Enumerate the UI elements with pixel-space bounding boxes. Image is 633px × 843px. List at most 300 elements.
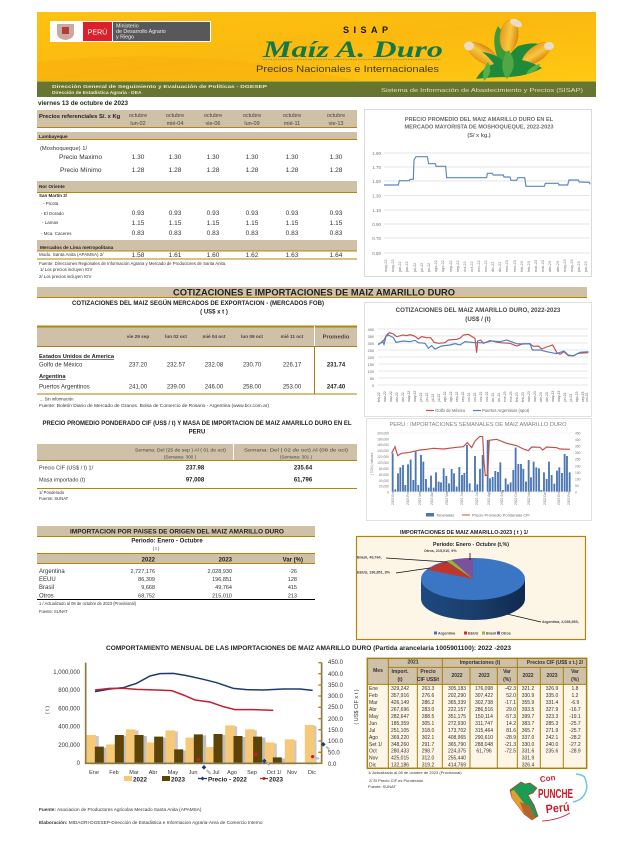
chart: Moshoqueque wholesale price line: sep-22	[449, 260, 453, 272]
panel: monthly data table: Set 1/	[369, 742, 383, 748]
chart: weekly imports Peru: 2022 Oct	[514, 492, 518, 505]
chart: maize quotations 2022-2023: 350	[368, 335, 374, 339]
panel: national reference prices table: 1.30	[246, 154, 259, 161]
chart: maize quotations 2022-2023: mar-22	[389, 391, 393, 402]
chart: Moshoqueque wholesale price line: feb-23	[520, 261, 524, 272]
panel: monthly data table: 425,015	[391, 756, 409, 762]
panel: monthly data table: 1/ Actualizado al 08 de octubre de 2023 (Provisional)	[368, 770, 462, 775]
chart: maize quotations 2022-2023: nov-22	[479, 392, 483, 402]
panel: national reference prices table: 1.28	[246, 167, 259, 174]
chart: monthly imports and prices: Jun	[189, 770, 197, 776]
panel: monthly data table: 318.0	[422, 728, 434, 734]
panel: monthly data table: 357,916	[391, 693, 409, 699]
panel: monthly data table: 426,149	[391, 700, 409, 706]
chart: monthly imports and prices: 450.0	[328, 660, 344, 666]
chart: weekly imports Peru: PERU : IMPORTACIONES SEMANALES DE MAIZ AMARILLO DURO	[389, 422, 567, 428]
chart: weekly imports Peru: 2022 Dic	[543, 492, 547, 505]
logo: Con Punche Peru: Con	[539, 773, 556, 784]
panel: monthly data table: 393.5	[522, 707, 534, 713]
panel: weighted CIF price table: 61,796	[294, 478, 313, 484]
chart: monthly imports and prices: 400,000	[58, 724, 81, 730]
panel: monthly data table: 369,220	[391, 735, 409, 741]
chart: weekly imports Peru: 2022 Jun	[460, 491, 464, 505]
chart: monthly imports and prices	[45, 660, 360, 784]
chart: Moshoqueque wholesale price line: ago-22	[434, 260, 438, 272]
panel: weighted CIF price table: 237.98	[186, 466, 205, 472]
panel: monthly data table: 307,422	[475, 693, 493, 699]
panel: monthly data table: 173,702	[448, 728, 466, 734]
panel: monthly data table: 305.1	[422, 721, 434, 727]
panel: national reference prices table: 1.15	[286, 220, 299, 227]
chart: weekly imports Peru: 200,000	[377, 432, 389, 436]
chart: monthly imports and prices: Ene	[89, 770, 99, 776]
panel: national reference prices table: 1.63	[286, 252, 299, 259]
panel: monthly data table: -72.5	[505, 749, 516, 755]
panel: monthly data table: 2022	[522, 673, 534, 679]
chart: Moshoqueque wholesale price line: feb-23	[527, 261, 531, 272]
panel: monthly data table: 321.2	[522, 686, 534, 692]
chart: monthly imports and prices: Mar	[129, 770, 139, 776]
section heading band: COTIZACIONES E IMPORTACIONES DE MAIZ AMARILLO DURO	[173, 288, 455, 298]
panel: FOB quotations table: COTIZACIONES DEL MAIZ SEGÚN MERCADOS DE EXPORTACION - (MERCADOS FOB)	[72, 300, 324, 307]
panel: FOB quotations table: Promedio	[323, 334, 350, 340]
panel: monthly data table: (%)	[503, 677, 511, 683]
panel: national reference prices table: 1.28	[132, 167, 145, 174]
panel: monthly data table: -57.3	[505, 714, 516, 720]
panel: national reference prices table: Lambayeque	[39, 134, 68, 139]
chart: monthly imports and prices: Oct 1/	[267, 770, 282, 776]
panel: national reference prices table: 1.15	[207, 220, 220, 227]
header banner	[37, 12, 596, 97]
panel: monthly data table: 331.4	[546, 700, 558, 706]
chart: maize quotations 2022-2023: sep-22	[455, 392, 459, 402]
panel: national reference prices table: lun-02	[130, 121, 146, 127]
panel: weighted CIF price table: 235.64	[294, 466, 313, 472]
panel: monthly data table: 414,769	[448, 762, 466, 768]
panel: monthly data table: 285.3	[546, 721, 558, 727]
panel: national reference prices table: vie-13	[329, 121, 343, 127]
panel: monthly data table: Feb	[369, 693, 378, 699]
panel: monthly data table: 132,186	[391, 762, 409, 768]
panel: national reference prices table: Precios referenciales S/. x Kg	[39, 114, 121, 120]
chart: Moshoqueque wholesale price line: MERCADO MAYORISTA DE MOSHOQUEQUE, 2022-2023	[404, 124, 554, 130]
chart: maize quotations 2022-2023: abr-22	[395, 392, 399, 402]
panel: monthly data table: 202,290	[448, 693, 466, 699]
panel: monthly data table: 335.0	[546, 693, 558, 699]
panel: monthly data table: 286,516	[475, 707, 493, 713]
panel: national reference prices table: 1.58	[132, 252, 145, 259]
chart: maize quotations 2022-2023: jun-22	[425, 392, 429, 403]
panel: national reference prices table: 0.93	[330, 210, 343, 217]
chart title: monthly behaviour: COMPORTAMIENTO MENSUAL DE LAS IMPORTACIONES DE MAIZ AMARILLO DURO (Partida arancelaria 1005901100): 2022 -2023	[106, 645, 512, 652]
panel: national reference prices table: - Picota	[43, 201, 59, 206]
panel: imports by origin table: Var (%)	[283, 558, 303, 564]
panel: monthly data table: Abr	[369, 707, 377, 713]
panel: imports by origin table: 49,764	[215, 585, 232, 591]
panel: imports by origin table: Brasil	[39, 585, 54, 591]
banner subtitle: Precios Nacionales e Internacionales	[256, 64, 439, 75]
panel: national reference prices table: Nor Oriente	[39, 184, 65, 189]
panel: imports by origin table: 9,668	[141, 585, 155, 591]
chart: maize quotations 2022-2023: 0	[372, 384, 374, 388]
chart: weekly imports Peru: 2022 Abr	[430, 491, 434, 505]
panel: monthly data table: Importaciones (t)	[460, 660, 501, 666]
chart: Moshoqueque wholesale price line: 0.90	[372, 222, 381, 227]
source note: Fuente: Asociacion de Productores Agricolas Mercado Santa Anita (APAMSA)	[39, 807, 202, 812]
panel: FOB quotations table: ( US$ x t )	[200, 310, 228, 316]
chart: maize quotations 2022-2023: may-22	[413, 391, 417, 402]
panel: national reference prices table: octubre	[204, 113, 222, 119]
panel: FOB quotations table: 239.00	[167, 384, 186, 390]
panel: monthly data table: May	[369, 714, 379, 720]
chart: maize quotations 2022-2023: jul-23	[569, 394, 573, 403]
panel: monthly data table: -42.3	[505, 686, 516, 692]
panel: monthly data table: 224,375	[448, 749, 466, 755]
chart: maize quotations 2022-2023: mar-22	[383, 391, 387, 402]
chart: maize quotations 2022-2023: 250	[368, 349, 374, 353]
chart: Moshoqueque wholesale price line: jul-22	[427, 263, 431, 273]
chart: monthly imports and prices: 50.0	[328, 750, 340, 756]
panel: monthly data table: 305,183	[448, 686, 466, 692]
panel: monthly data table: (t)	[398, 677, 403, 683]
chart: origin pie: Periodo: Enero - Octubre (t,%)	[433, 542, 509, 548]
chart: origin pie: EEUU	[468, 632, 479, 636]
chart: weekly imports Peru: 2023 Feb	[406, 491, 410, 505]
chart: Moshoqueque wholesale price line: 1.90	[372, 151, 381, 156]
panel: national reference prices table: 1.61	[169, 252, 182, 259]
panel: monthly data table: 337.0	[522, 735, 534, 741]
chart: maize quotations 2022-2023: Golfo de México	[435, 408, 466, 413]
panel: monthly data table: Nov	[369, 756, 378, 762]
panel: weighted CIF price table: Precio CIF (US$ / t) 1/	[39, 466, 94, 472]
chart: Moshoqueque wholesale price line: jun-23	[577, 261, 581, 273]
panel: national reference prices table: 0.83	[246, 230, 259, 237]
chart: maize quotations 2022-2023: abr-23	[545, 392, 549, 402]
panel: national reference prices table: 0.83	[330, 230, 343, 237]
chart: maize quotations 2022-2023: feb-23	[521, 392, 525, 402]
panel: monthly data table: 251,105	[391, 728, 409, 734]
panel: FOB quotations table: 246.00	[205, 384, 224, 390]
chart: maize quotations 2022-2023	[364, 302, 592, 416]
panel: monthly data table: 283.0	[422, 707, 434, 713]
chart: Moshoqueque wholesale price line: nov-22	[484, 260, 488, 272]
panel: imports by origin table: 2,028,930	[208, 569, 232, 575]
chart: monthly imports and prices: Jul	[212, 770, 220, 776]
panel: national reference prices table: 1.15	[330, 220, 343, 227]
panel: national reference prices table: 1/ Los precios incluyen IGV	[40, 267, 92, 272]
chart: origin pie	[356, 530, 586, 640]
panel: monthly data table: -19.1	[569, 714, 581, 720]
panel: FOB quotations table: mié 11 oct	[281, 334, 304, 339]
chart: maize quotations 2022-2023: 300	[368, 342, 374, 346]
panel: national reference prices table: 1.64	[330, 252, 343, 259]
panel: national reference prices table: 0.83	[132, 230, 145, 237]
panel: weighted CIF price table: Fuente: SUNAT	[39, 496, 69, 501]
logo: Con Punche Peru	[510, 773, 587, 821]
chart: origin pie: Otros	[501, 632, 511, 636]
panel: FOB quotations table: vie 29 sep	[127, 334, 149, 339]
chart: weekly imports Peru: 2022 May	[445, 490, 449, 505]
date: viernes 13 de octubre de 2023	[38, 100, 128, 107]
panel: weighted CIF price table: Masa importado (t)	[39, 478, 85, 484]
panel: monthly data table: 235.6	[546, 749, 558, 755]
chart: Moshoqueque wholesale price line: 1.10	[372, 208, 381, 213]
panel: monthly data table: 365.7	[522, 728, 534, 734]
panel: monthly data table: 14.2	[506, 721, 516, 727]
chart: maize quotations 2022-2023: may-23	[551, 391, 555, 402]
chart: monthly imports and prices: Ago	[227, 770, 237, 776]
panel: national reference prices table: 1.30	[132, 154, 145, 161]
panel: national reference prices table: 0.93	[286, 210, 299, 217]
panel: national reference prices table: Precio Mínimo	[60, 167, 102, 174]
chart: maize quotations 2022-2023: Puertos Argentinos (spot)	[482, 408, 530, 413]
chart: Moshoqueque wholesale price line: mar-23	[541, 260, 545, 272]
chart: origin pie: Otros, 215,010, 9%	[424, 549, 457, 553]
logo: Ministerio de Desarrollo Agrario y Riego: de Desarrollo Agrario	[116, 29, 166, 35]
panel: monthly data table: Jun	[369, 721, 377, 727]
chart: Moshoqueque wholesale price line: dic-22	[491, 262, 495, 272]
panel: imports by origin table: 86,309	[138, 577, 155, 583]
panel: imports by origin table: Argentina	[39, 569, 65, 575]
chart: maize quotations 2022-2023: 400	[368, 328, 374, 332]
panel: monthly data table: 2023	[546, 673, 558, 679]
chart: Moshoqueque wholesale price line: ago-22	[441, 260, 445, 272]
chart: weekly imports Peru: 180,000	[377, 438, 389, 442]
panel: national reference prices table: lun-09	[244, 121, 260, 127]
panel: national reference prices table: 1.15	[169, 220, 182, 227]
panel: FOB quotations table: Puertos Argentinos	[39, 384, 90, 390]
chart: Moshoqueque wholesale price line: jun-23	[584, 261, 588, 273]
panel: national reference prices table: 0.83	[286, 230, 299, 237]
header banner: Dirección de Estadística Agraria - DEA	[52, 90, 142, 96]
panel: national reference prices table: 1.30	[207, 154, 220, 161]
panel: monthly data table: 326.9	[546, 686, 558, 692]
chart legend	[124, 776, 284, 784]
chart: maize quotations 2022-2023: sep-22	[461, 392, 465, 402]
panel: national reference prices table: - Lamas	[42, 220, 59, 225]
panel: monthly data table: 330.0	[522, 742, 534, 748]
chart: monthly imports and prices: Nov	[287, 770, 297, 776]
chart: Moshoqueque wholesale price line: sep-22	[456, 260, 460, 272]
chart: maize quotations 2022-2023: abr-23	[539, 392, 543, 402]
chart: maize quotations 2022-2023: nov-22	[485, 392, 489, 402]
chart: monthly imports and prices: 600,000	[58, 706, 81, 712]
chart: weekly imports Peru: ( TON.) Valores	[370, 452, 374, 475]
panel: monthly data table: 319.2	[422, 762, 434, 768]
chart: origin pie: Argentina, 2,028,930,	[542, 620, 579, 624]
panel: national reference prices table: octubre	[166, 113, 184, 119]
panel: monthly data table: 2021	[407, 660, 419, 666]
panel: FOB quotations table: 247.40	[327, 384, 346, 390]
chart legend: 2023	[269, 776, 284, 784]
panel: FOB quotations table: lun 02 oct	[165, 334, 187, 339]
chart: weekly imports Peru: 20,000	[379, 484, 389, 488]
chart: maize quotations 2022-2023: ene-23	[503, 391, 507, 402]
chart: origin pie: Argentina	[438, 632, 456, 636]
panel: monthly data table: 288.5	[422, 714, 434, 720]
panel: monthly data table: 255,440	[448, 756, 466, 762]
panel: imports by origin table: ( t )	[153, 546, 160, 551]
panel: monthly data table: Ene	[369, 686, 378, 692]
chart: monthly imports and prices: 0	[77, 761, 81, 767]
chart: Moshoqueque wholesale price line: may-22	[391, 259, 395, 272]
panel: imports by origin table: Periodo: Enero - Octubre	[131, 538, 203, 544]
panel: imports by origin table: 415	[288, 585, 297, 591]
panel: monthly data table: 1.2	[572, 693, 579, 699]
panel: monthly data table: 351,175	[448, 714, 466, 720]
panel: monthly data table: 288,048	[475, 742, 493, 748]
panel: monthly data table: 365,339	[448, 700, 466, 706]
chart: Moshoqueque wholesale price line: jun-22	[405, 261, 409, 273]
panel: national reference prices table: octubre	[327, 113, 345, 119]
chart: weekly imports Peru: 2022 Ago	[487, 491, 491, 505]
chart: Moshoqueque wholesale price line	[364, 110, 592, 276]
chart: Moshoqueque wholesale price line: 1.70	[372, 165, 381, 170]
chart: weekly imports Peru: Toneladas	[436, 512, 454, 518]
chart: maize quotations 2022-2023: jul-22	[431, 394, 435, 403]
panel: national reference prices table: octubre	[129, 113, 147, 119]
panel: FOB quotations table: 258.00	[243, 384, 262, 390]
panel: monthly data table: 302,738	[475, 700, 493, 706]
panel: national reference prices table: 1.60	[207, 252, 220, 259]
chart: monthly imports and prices: Sep	[247, 770, 257, 776]
panel: monthly data table: 315,464	[475, 728, 493, 734]
chart: maize quotations 2022-2023: (US$ / (t)	[465, 316, 491, 323]
panel: imports by origin table: IMPORTACION POR PAISES DE ORIGEN DEL MAIZ AMARILLO DURO	[70, 530, 284, 536]
panel: national reference prices table: vie-06	[206, 121, 220, 127]
panel: FOB quotations table: ... Sin información	[40, 396, 74, 402]
chart: maize quotations 2022-2023: ago-23	[575, 391, 579, 402]
panel: monthly data table: 326.4	[522, 762, 534, 768]
chart: weekly imports Peru: 250	[575, 458, 581, 462]
panel: monthly data table: 329,242	[391, 686, 409, 692]
chart: weekly imports Peru: 2023 Ene	[391, 491, 395, 505]
panel: national reference prices table: 0.93	[246, 210, 259, 217]
chart: weekly imports Peru: 2023 Feb	[567, 491, 571, 505]
panel: monthly data table: 327.9	[546, 707, 558, 713]
panel: imports by origin table: 2,727,176	[131, 569, 155, 575]
panel: national reference prices table: San Martín 2/	[39, 193, 68, 198]
panel: imports by origin table: -26	[289, 569, 297, 575]
panel: monthly data table: -25.7	[569, 728, 581, 734]
chart: Moshoqueque wholesale price line: ene-23	[505, 260, 509, 272]
chart: weekly imports Peru: 450	[575, 432, 581, 436]
chart: monthly imports and prices: 0.0	[328, 762, 337, 768]
panel: monthly data table: 280,433	[391, 749, 409, 755]
chart: monthly imports and prices: 1,000,000	[53, 670, 81, 676]
panel: imports by origin table	[37, 526, 315, 614]
panel: monthly data table: 399.7	[522, 714, 534, 720]
panel: monthly data table: Mar	[369, 700, 378, 706]
chart: maize quotations 2022-2023: 50	[370, 377, 374, 381]
panel: monthly data table: 291.7	[422, 742, 434, 748]
panel: imports by origin table: 196,851	[212, 577, 232, 583]
panel: monthly data table: -6.9	[571, 700, 580, 706]
chart: weekly imports Peru: 50	[575, 484, 579, 488]
panel: monthly data table: 2023	[478, 673, 490, 679]
chart: maize quotations 2022-2023: ago-22	[449, 391, 453, 402]
panel: national reference prices table: 0.93	[207, 210, 220, 217]
panel: monthly data table: 383.7	[522, 721, 534, 727]
chart: origin pie: IMPORTACIONES DE MAIZ AMARILLO-2023 ( t ) 1/	[400, 530, 528, 536]
chart: weekly imports Peru: 120,000	[377, 455, 389, 459]
panel: monthly data table: -27.2	[569, 742, 581, 748]
chart: maize quotations 2022-2023: oct-23	[585, 392, 589, 402]
panel: weighted CIF price table	[37, 421, 357, 501]
panel: weighted CIF price table: (Semana: 301 )	[280, 454, 313, 460]
chart: Moshoqueque wholesale price line: may-23	[570, 259, 574, 272]
chart: weekly imports Peru: 2023 Mar	[418, 490, 422, 505]
panel: monthly data table: 408,965	[448, 735, 466, 741]
panel: monthly data table: 355.9	[522, 700, 534, 706]
panel: monthly data table: 298.7	[422, 749, 434, 755]
chart: monthly imports and prices: 800,000	[58, 688, 81, 694]
panel: national reference prices table: 1.30	[286, 154, 299, 161]
chart: Moshoqueque wholesale price line: 0.70	[372, 236, 381, 241]
chart: weekly imports Peru: 0	[387, 490, 389, 494]
panel: national reference prices table: 1.30	[330, 154, 343, 161]
chart: Moshoqueque wholesale price line: PRECIO PROMEDIO DEL MAIZ AMARILLO DURO EN EL	[405, 117, 554, 123]
panel: monthly data table: CIF US$/t	[417, 677, 439, 683]
chart: maize quotations 2022-2023: dic-22	[497, 393, 501, 402]
panel: monthly data table: (%)	[571, 677, 579, 683]
panel: monthly data table: 222,157	[448, 707, 466, 713]
chart: weekly imports Peru: 60,000	[379, 473, 389, 477]
chart: maize quotations 2022-2023: mar-23	[527, 391, 531, 402]
chart legend: Precio - 2022	[208, 776, 247, 784]
chart: weekly imports Peru: 400	[575, 438, 581, 442]
banner title SISAP: SISAP	[343, 25, 388, 35]
panel: national reference prices table: 1.15	[246, 220, 259, 227]
chart: maize quotations 2022-2023: sep-23	[581, 392, 585, 402]
panel: monthly data table: 323.3	[546, 714, 558, 720]
chart: Moshoqueque wholesale price line: ene-23	[513, 260, 517, 272]
panel: national reference prices table: octubre	[283, 113, 301, 119]
panel: monthly data table: 81.6	[506, 728, 516, 734]
panel: monthly data table: Mes	[373, 668, 383, 674]
panel: monthly data table: 263.3	[422, 686, 434, 692]
panel: monthly data table: 267,696	[391, 707, 409, 713]
panel: national reference prices table: 1.28	[169, 167, 182, 174]
chart: monthly imports and prices: 100.0	[328, 739, 344, 745]
panel: FOB quotations table: Fuente: Boletín Diario de Mercado de Granos. Bolsa de Comercio de Rosario - Argentina (www.bcr.com.ar)	[39, 403, 270, 408]
panel: FOB quotations table: 253.00	[283, 384, 302, 390]
panel: imports by origin table: 213	[288, 594, 297, 600]
panel: monthly data table: -28.9	[505, 735, 516, 741]
panel: national reference prices table: 0.83	[207, 230, 220, 237]
chart: weekly imports Peru: 2022 Nov	[527, 491, 531, 505]
panel: monthly data table: 29.0	[506, 707, 516, 713]
panel: FOB quotations table: 231.74	[327, 362, 346, 368]
panel: monthly data table: Ago	[369, 735, 378, 741]
chart: monthly imports and prices: May	[168, 770, 178, 776]
panel: monthly data table: Var	[571, 669, 579, 675]
chart: monthly imports and prices: 200.0	[328, 717, 344, 723]
chart: Moshoqueque wholesale price line: jun-22	[398, 261, 402, 273]
chart: maize quotations 2022-2023: jun-22	[419, 392, 423, 403]
panel: monthly data table: 2/ El Precio CIF es Ponderado	[369, 778, 424, 783]
panel: monthly data table	[367, 658, 587, 789]
chart: weekly imports Peru: 2022 Jul	[475, 492, 479, 505]
panel: imports by origin table: 215,010	[212, 594, 232, 600]
chart: weekly imports Peru: 80,000	[379, 467, 389, 471]
panel: FOB quotations table: 232.08	[205, 362, 224, 368]
panel: national reference prices table: Fuente: Direcciones Regionales de Información Agraria y Mercado de Productores de Santa Anita.	[39, 261, 226, 266]
panel: monthly data table: Var	[503, 669, 511, 675]
panel: monthly data table: 290,610	[475, 735, 493, 741]
panel: monthly data table: -25.7	[569, 721, 581, 727]
icon: corn cobs	[464, 17, 554, 81]
